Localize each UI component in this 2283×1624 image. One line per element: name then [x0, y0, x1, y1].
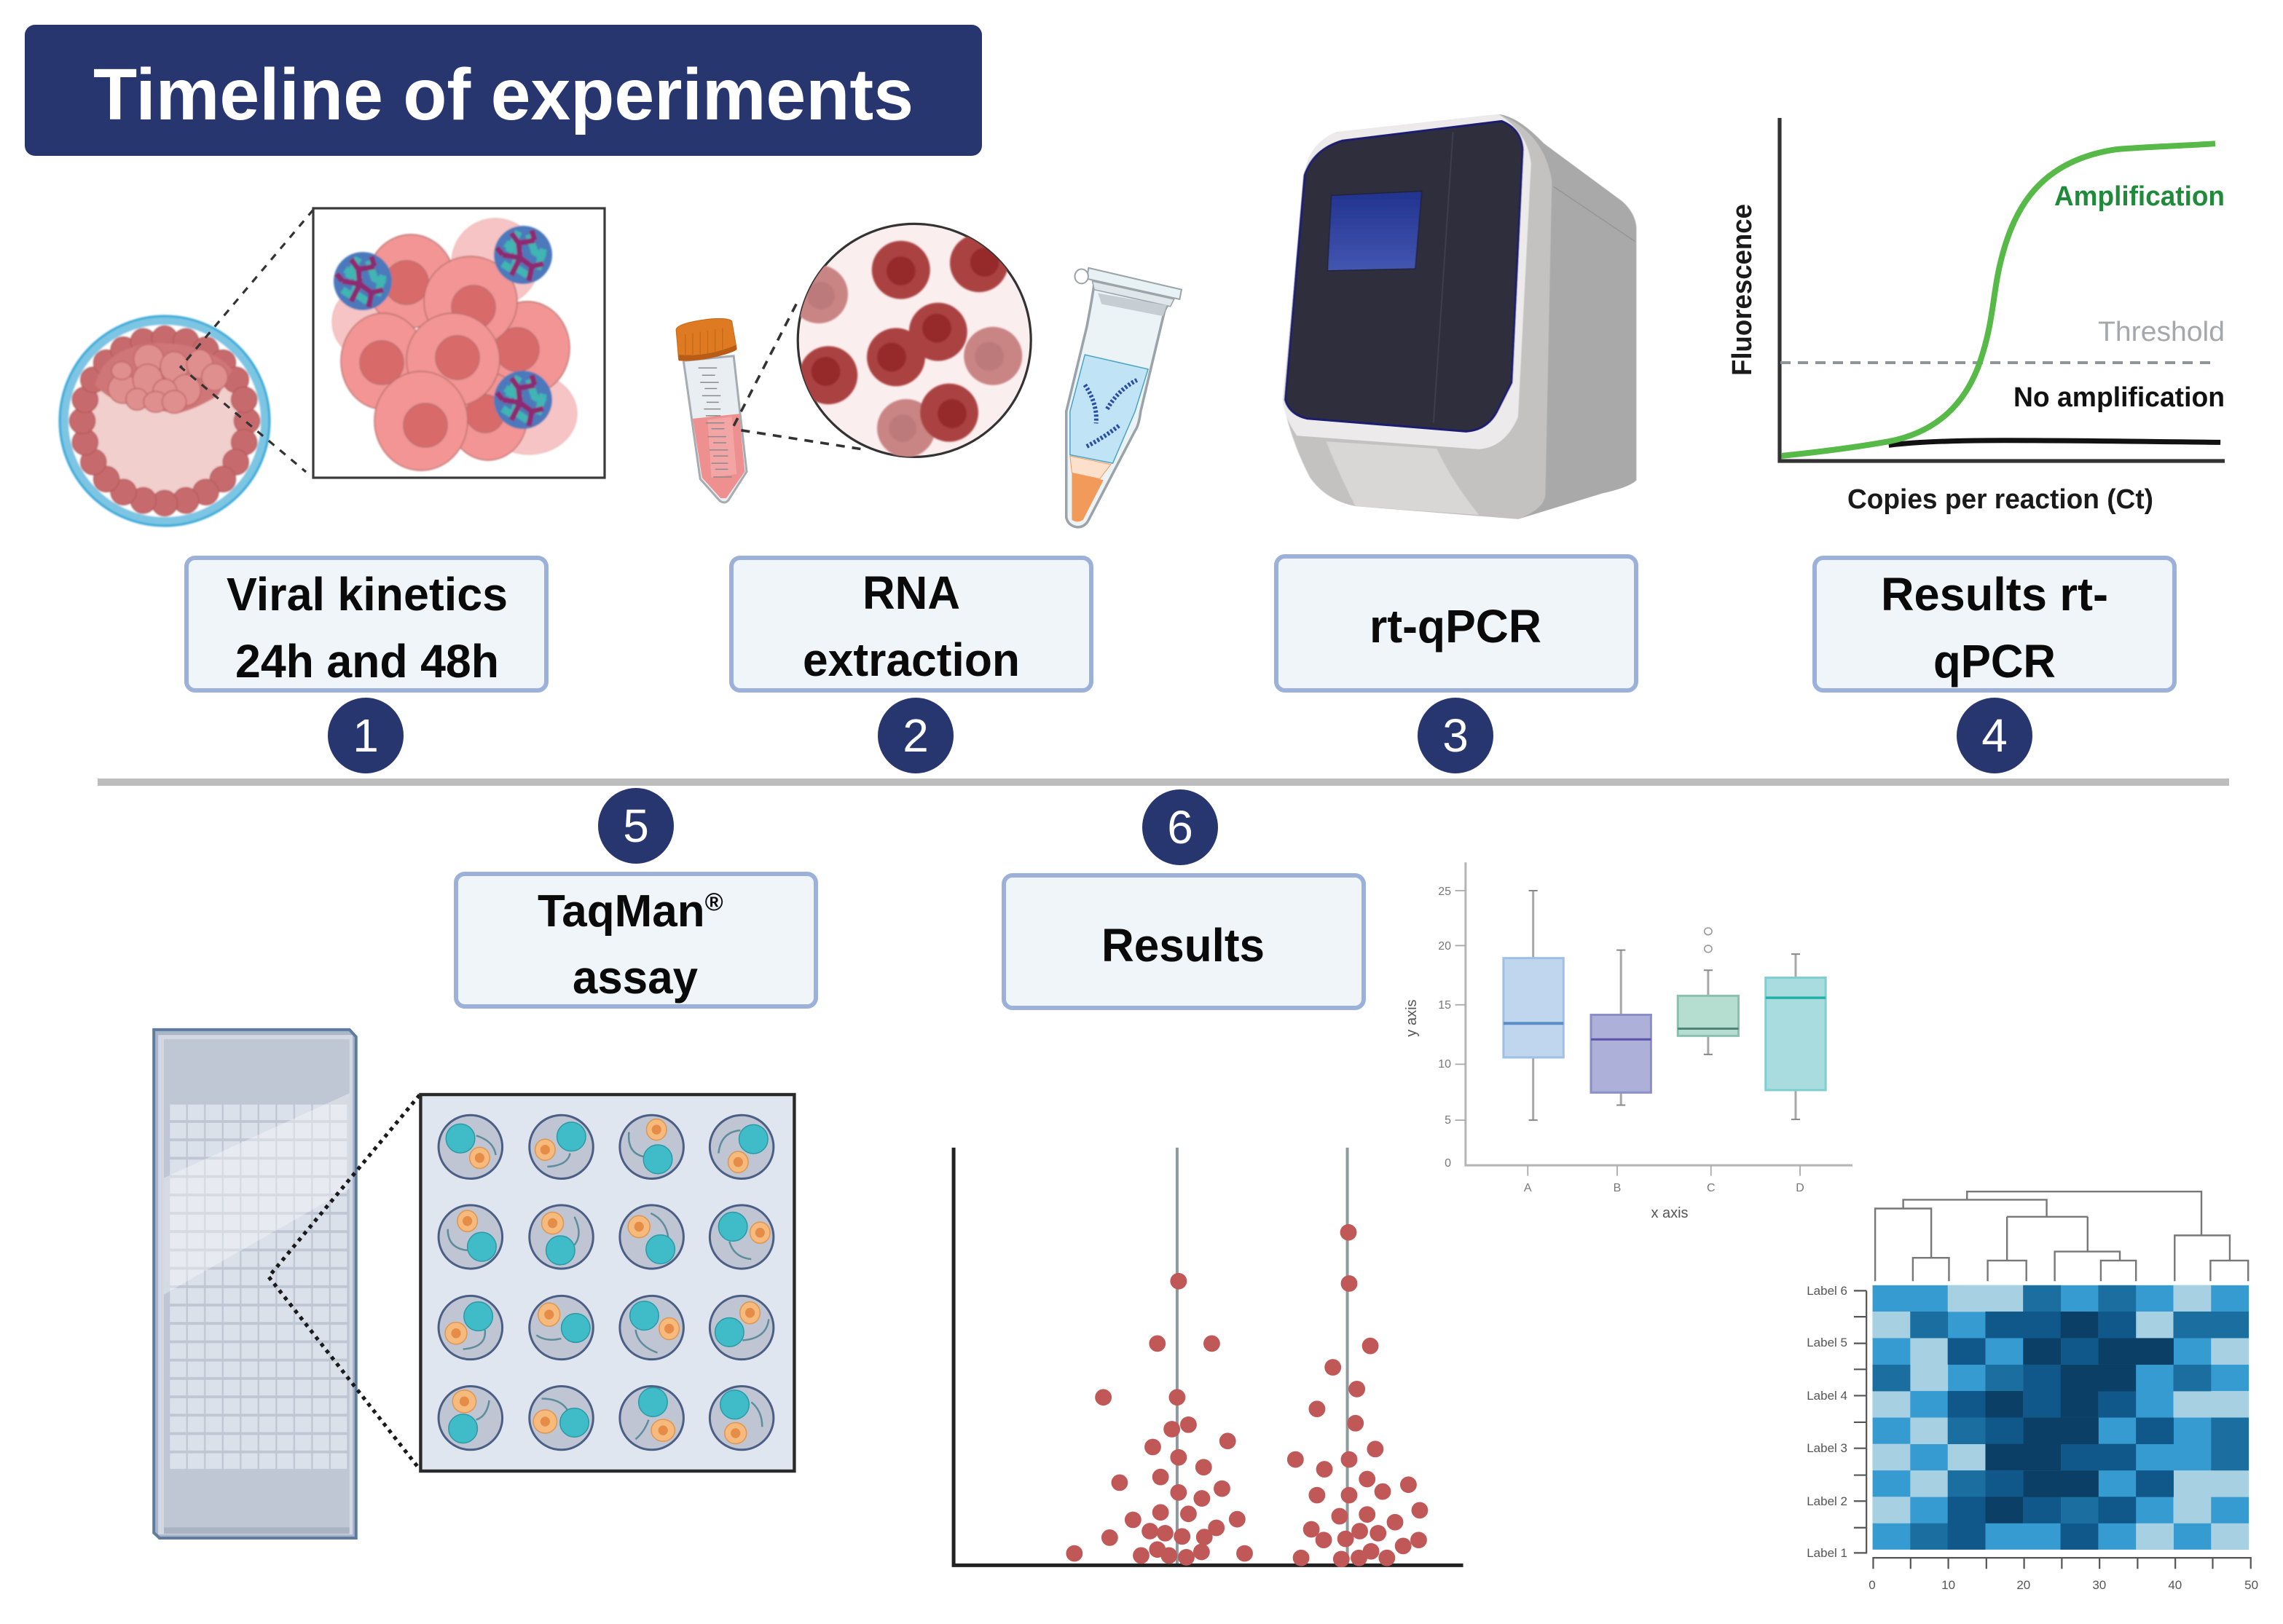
dashed zoom lines: tube to circle: [734, 300, 868, 450]
chart: dot plot: [954, 1148, 1463, 1566]
chart: box plot: 20: [1438, 940, 1451, 953]
amplification curve: [1781, 143, 2215, 456]
label: amplification: Amplification: [2054, 181, 2225, 212]
chart: heatmap with dendrogram: Label 4: [1807, 1389, 1847, 1403]
step label 6: results: [1004, 875, 1364, 1008]
icon: microcentrifuge tube with RNA: [1066, 268, 1182, 527]
chart: heatmap with dendrogram: Label 1: [1807, 1546, 1847, 1560]
chart: heatmap with dendrogram: [1807, 1191, 2258, 1592]
chart: heatmap with dendrogram: 0: [1869, 1578, 1876, 1592]
step label 1: viral kinetics: Viral kinetics: [227, 568, 508, 620]
label: threshold: Threshold: [2098, 317, 2225, 347]
step label 3: rt-qPCR: rt-qPCR: [1370, 600, 1541, 653]
chart: box plot: 5: [1445, 1114, 1451, 1127]
chart: heatmap with dendrogram: Label 2: [1807, 1494, 1847, 1508]
chart: box plot: 25: [1438, 886, 1451, 898]
x axis label: Copies per reaction (Ct): [1847, 484, 2153, 515]
number badge 1: [328, 698, 404, 773]
title banner: [25, 25, 982, 156]
step label 1: viral kinetics: 24h and 48h: [235, 635, 499, 687]
chart: box plot: [1404, 862, 1852, 1221]
no amplification curve: [1889, 441, 2220, 445]
heatmap cells: [1873, 1285, 2249, 1550]
axes: [1780, 118, 2225, 461]
chart: box plot: y axis: [1404, 999, 1420, 1037]
panel: wells zoom: [420, 1095, 794, 1471]
illustration: TaqMan array card: [154, 1030, 356, 1538]
number badge 1: 1: [353, 709, 379, 762]
chart: heatmap with dendrogram: 40: [2168, 1578, 2182, 1592]
number badge 6: 6: [1167, 801, 1193, 854]
icon: falcon tube: [676, 318, 747, 502]
number badge 4: [1957, 698, 2032, 773]
chart: heatmap with dendrogram: Label 6: [1807, 1284, 1847, 1298]
chart: heatmap with dendrogram: 50: [2244, 1578, 2258, 1592]
chart: box plot: B: [1614, 1182, 1621, 1194]
dendrogram: [1875, 1191, 2248, 1281]
step label 4: results rt-qPCR: qPCR: [1933, 635, 2056, 687]
icon: rt-qPCR machine: [1283, 114, 1636, 519]
number badge 5: [598, 788, 674, 864]
number badge 5: 5: [623, 800, 649, 852]
chart: amplification curve: [1727, 118, 2225, 515]
panel: RNA extraction cell circle: [790, 224, 1031, 457]
chart: heatmap with dendrogram: 20: [2016, 1578, 2030, 1592]
number badge 2: 2: [903, 709, 929, 762]
chart: heatmap with dendrogram: Label 5: [1807, 1336, 1847, 1349]
step label 4: results rt-qPCR: [1815, 558, 2174, 690]
step label 2: RNA extraction: RNA: [862, 567, 960, 619]
threshold line: [1780, 362, 2217, 363]
chart: box plot: x axis: [1651, 1205, 1689, 1221]
number badge 6: [1142, 789, 1218, 865]
chart: heatmap with dendrogram: 10: [1941, 1578, 1955, 1592]
chart: box plot: 0: [1445, 1157, 1451, 1170]
y axis label: Fluorescence: [1727, 204, 1758, 376]
number badge 3: [1418, 698, 1493, 773]
step label 6: results: Results: [1101, 919, 1265, 971]
step label 5: TaqMan assay: assay: [573, 951, 698, 1004]
step label 2: RNA extraction: extraction: [803, 634, 1020, 686]
dotted zoom lines: card to well panel: [269, 1095, 420, 1469]
step label 4: results rt-qPCR: Results rt-: [1881, 568, 2108, 620]
step label 3: rt-qPCR: [1276, 556, 1636, 690]
illustration: blastocyst: [60, 316, 270, 526]
label: no amplification: No amplification: [2013, 382, 2225, 413]
chart: box plot: C: [1707, 1182, 1716, 1194]
step label 5: TaqMan assay: [456, 874, 816, 1006]
chart: heatmap with dendrogram: 30: [2092, 1578, 2106, 1592]
heatmap axes: [1854, 1290, 2251, 1569]
chart: box plot: D: [1796, 1182, 1804, 1194]
chart: heatmap with dendrogram: Label 3: [1807, 1441, 1847, 1455]
number badge 4: 4: [1981, 709, 2008, 762]
panel: infected cell inset: [313, 208, 605, 478]
chart: box plot: 15: [1438, 999, 1451, 1012]
number badge 2: [878, 698, 954, 773]
step label 2: RNA extraction: [731, 558, 1091, 690]
title banner: Timeline of experiments: [93, 54, 913, 135]
step label 1: viral kinetics: [186, 558, 546, 690]
step label 5: TaqMan assay: TaqMan: [538, 886, 705, 937]
step label 5: TaqMan assay: ®: [705, 888, 723, 916]
number badge 3: 3: [1442, 709, 1469, 762]
chart: box plot: 10: [1438, 1058, 1451, 1071]
dashed zoom lines: blastocyst to inset: [181, 210, 313, 472]
chart: box plot: A: [1524, 1182, 1532, 1194]
